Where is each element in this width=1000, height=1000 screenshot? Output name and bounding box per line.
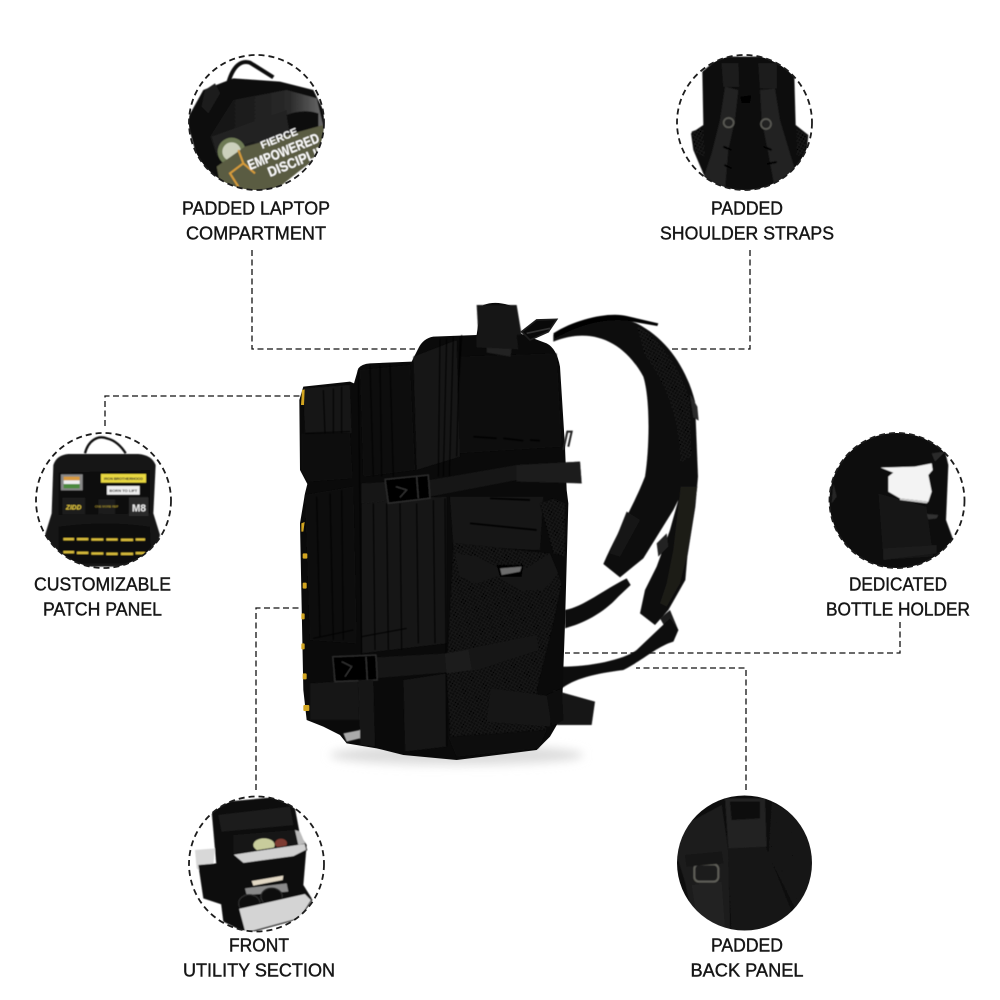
dashed ring [830,433,964,568]
photo: open laptop compartment: DISCIPLINE [265,139,336,180]
dashed ring [677,55,812,190]
connector: padded shoulder straps [672,250,750,349]
photo: patch panel: ONE MORE REP [95,505,118,509]
connector: padded laptop compartment [252,250,415,349]
photo: bottle in side pocket [827,430,953,570]
side tab strap [487,688,595,727]
upper compression strap and buckle [362,432,582,503]
label: FRONT [229,934,289,956]
label: BACK PANEL [690,960,804,980]
connector: padded back panel [636,668,746,790]
lower compression strap and buckle [333,635,538,747]
panel: padded shoulder straps [660,55,834,244]
photo: patch panel: M8 [132,504,146,515]
label: COMPARTMENT [186,222,326,244]
panel: padded back panel [677,796,812,977]
photo: patch panel: BORN TO LIFT [109,488,138,493]
stitching lines [305,335,540,747]
label: SHOULDER STRAPS [660,222,834,244]
photo: patch panel: ZIDD [65,504,82,511]
label: PADDED [711,198,783,218]
main body silhouette [299,303,568,760]
top buckle [522,319,557,340]
panel: front utility section [183,796,335,980]
label: PADDED LAPTOP [182,198,330,218]
photo: back of bag with straps [691,57,808,193]
dashed ring [189,796,324,932]
label: UTILITY SECTION [183,960,335,980]
photo: back panel mesh [677,796,812,930]
panel: padded laptop compartment [182,55,336,244]
photo: open laptop compartment [187,62,336,193]
label: DEDICATED [849,574,947,594]
label: CUSTOMIZABLE [34,574,171,594]
backpack side view [299,303,699,765]
body panels [302,305,562,757]
photo: open front pocket [195,797,312,933]
mesh bottle pocket [447,498,565,737]
connector: customizable patch panel [105,396,300,426]
shoulder strap [553,315,699,690]
label: BOTTLE HOLDER [826,598,970,620]
photo: patch panel: IRON BROTHERHOOD [104,477,143,481]
yellow accents [301,389,309,711]
photo: open laptop compartment: FIERCE [259,126,300,152]
dashed ring [189,55,324,190]
ground shadow [330,745,583,765]
panel: customizable patch panel [34,433,171,620]
connector: front utility section [256,608,300,790]
photo: open laptop compartment: EMPOWERED [245,130,322,173]
dashed ring [36,433,171,568]
white bottle [881,463,933,502]
connector: dedicated bottle holder [565,622,900,653]
label: PADDED [711,934,783,956]
photo: patch panel [45,437,160,567]
panel: dedicated bottle holder [826,430,970,620]
label: PATCH PANEL [43,598,162,620]
